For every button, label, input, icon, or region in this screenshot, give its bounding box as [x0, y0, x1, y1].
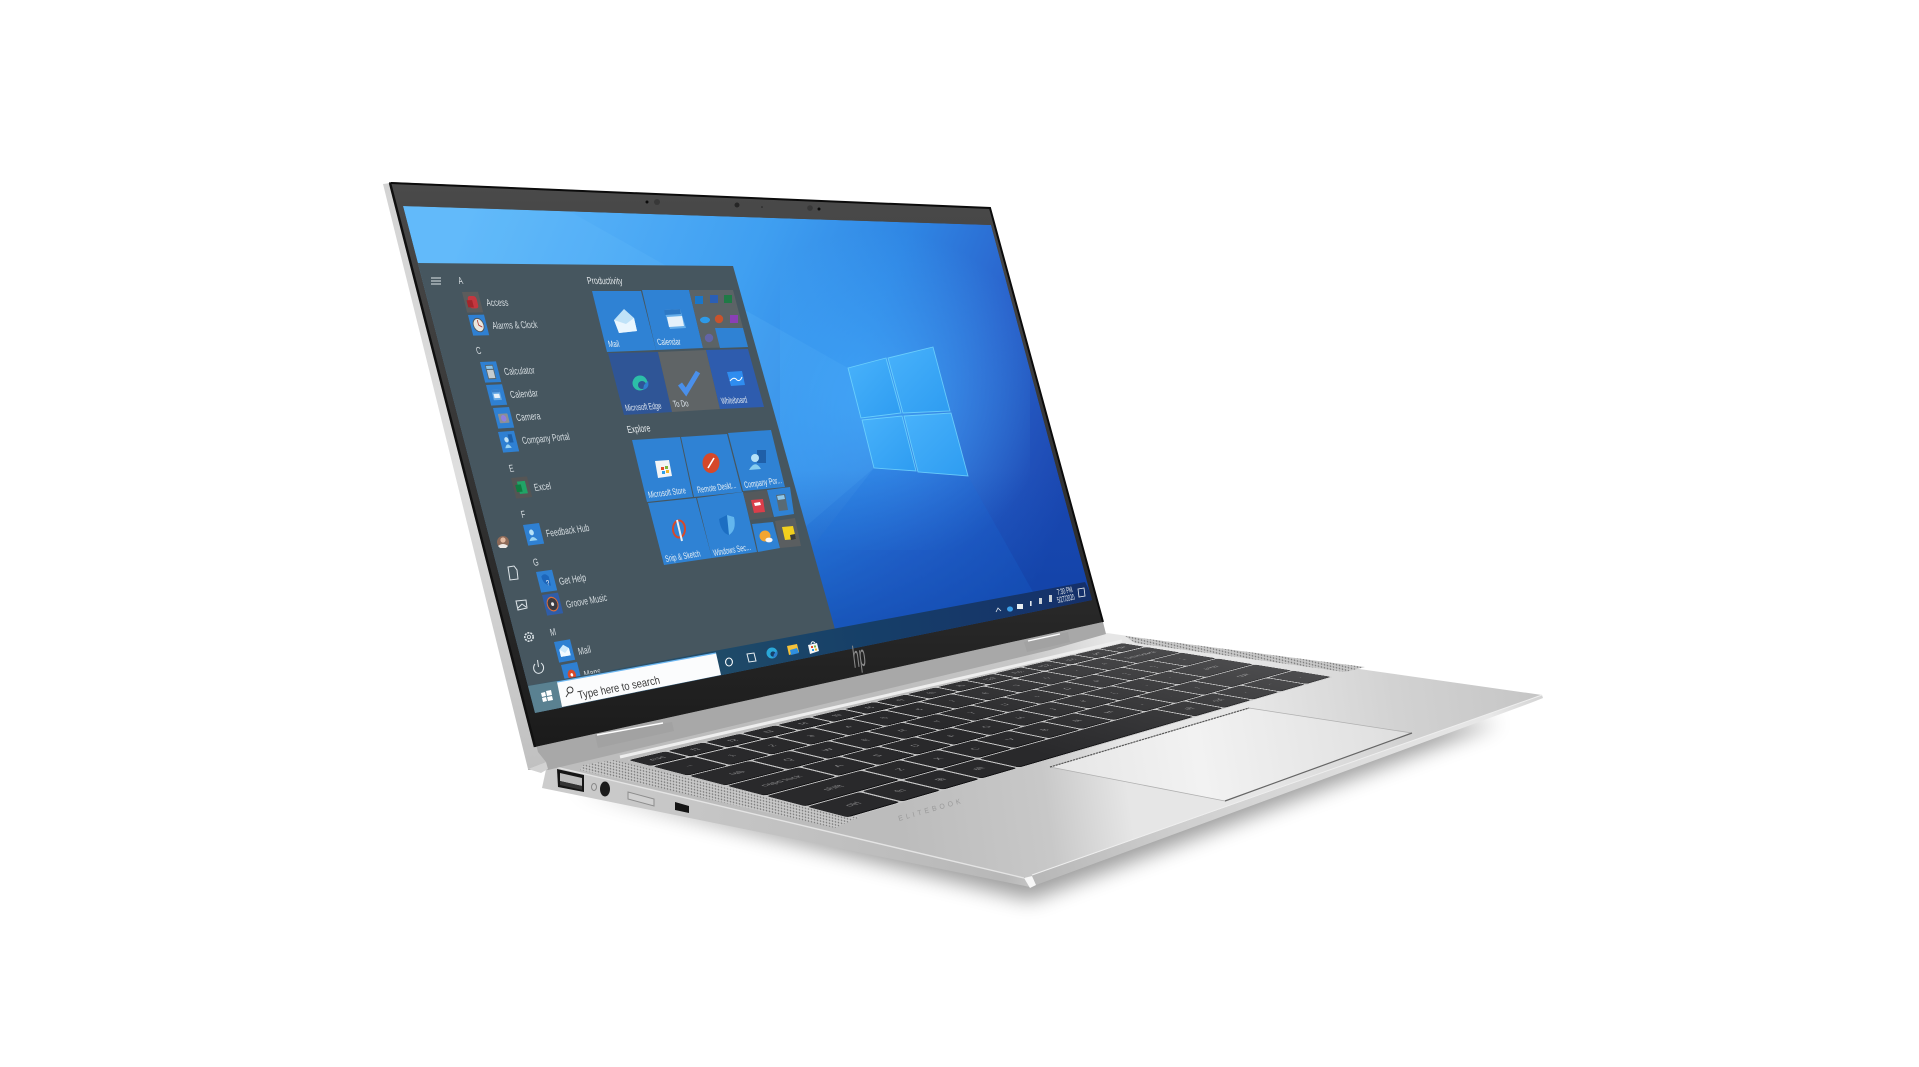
icon: Feedback Hub: [523, 523, 544, 546]
bottom row: alt: [1180, 707, 1197, 710]
icon: File Explorer: [787, 644, 799, 655]
shift row: Z: [892, 768, 908, 771]
function row: f2: [725, 738, 741, 742]
app list labels: Get Help: [558, 571, 587, 587]
bottom row: ctrl: [1209, 698, 1227, 702]
tile: Sticky Notes: [775, 518, 801, 548]
number row: 8: [979, 692, 991, 694]
app list labels: Calculator: [503, 364, 536, 377]
home row: ': [1167, 677, 1177, 679]
function row: f3: [761, 730, 777, 734]
tile: Whiteboard: Whiteboard: [720, 394, 748, 406]
qwerty row: Q: [780, 758, 796, 762]
webcam sensors: [646, 199, 820, 211]
app list letters: A: [457, 275, 464, 286]
number row: 6: [913, 708, 926, 711]
app list labels: Calendar: [509, 387, 539, 400]
home row: K: [1077, 699, 1091, 702]
tile: News: [743, 490, 773, 520]
icon: power: [534, 660, 544, 673]
icon: headset: [592, 784, 596, 790]
shift row: shift: [820, 784, 846, 791]
lid corner chamfer: [528, 762, 548, 773]
trackpad: [1050, 708, 1412, 801]
home row: F: [944, 734, 959, 738]
HP logo: hp: [851, 638, 867, 675]
app list letters: C: [475, 345, 483, 356]
icon: Get Help: [536, 570, 557, 593]
qwerty row: tab: [726, 770, 748, 776]
icon: Alarms & Clock: [468, 315, 489, 336]
qwerty row: O: [1060, 687, 1074, 690]
tile: Windows Security: [697, 492, 757, 558]
icon: pictures: [516, 600, 527, 610]
tile: Microsoft Store: Microsoft Store: [647, 485, 687, 500]
lid hinge band: [528, 622, 1106, 770]
tile: Remote Desktop: [681, 434, 742, 497]
number row: 5: [878, 716, 891, 719]
right side edge: [1026, 695, 1543, 888]
qwerty row: T: [931, 720, 945, 723]
icon: Windows: [541, 690, 553, 702]
function row: f12: [1036, 664, 1053, 668]
wallpaper: [400, 206, 1098, 713]
number row: 2: [765, 744, 779, 747]
tile: To Do: [658, 350, 720, 412]
icon: settings: [525, 633, 533, 641]
qwerty row: [690, 653, 1215, 785]
icon: documents: [508, 566, 518, 580]
icon: Access: [462, 292, 483, 313]
home row: G: [979, 725, 994, 728]
port: SIM slot: [628, 792, 654, 806]
shift row: M: [1101, 710, 1117, 714]
system tray: 5/27/2020: [1056, 593, 1076, 605]
function row: f11: [1009, 670, 1026, 674]
function row: f10: [981, 677, 999, 681]
office app icons: [695, 295, 738, 342]
shift row: ,: [1134, 703, 1145, 705]
search box: [557, 653, 721, 707]
port: USB: [557, 769, 584, 792]
qwerty row: Y: [965, 711, 979, 714]
tile: Microsoft Edge: [608, 352, 672, 415]
left speaker grille: [580, 760, 860, 828]
qwerty row: U: [998, 703, 1012, 706]
icon: Camera: [493, 407, 514, 429]
section heading: Explore: Explore: [626, 422, 652, 435]
icon: Calculator: [480, 361, 501, 383]
home row: H: [1013, 716, 1027, 719]
app list labels: Mail: [577, 643, 592, 657]
brand name on deck: ELITEBOOK: [898, 798, 965, 823]
bottom row: ˆ: [1267, 683, 1279, 686]
qwerty row: ]: [1148, 666, 1159, 668]
function row: ins: [1063, 658, 1079, 661]
app list labels: Maps: [583, 665, 603, 680]
home row: caps lock: [757, 775, 805, 787]
bottom row: alt: [969, 766, 988, 771]
system tray: [996, 586, 1085, 612]
shift row: /: [1192, 687, 1203, 689]
tile: Snip & Sketch: Snip & Sketch: [664, 548, 702, 564]
icon: task view: [747, 653, 756, 662]
app list labels: Groove Music: [565, 591, 609, 610]
number row: 0: [1041, 677, 1053, 679]
taskbar icons: [726, 642, 819, 666]
taskbar: [526, 582, 1094, 714]
home row: [728, 658, 1252, 796]
icon: Store: [808, 642, 819, 654]
shift row: N: [1070, 719, 1085, 722]
tile: Windows Security: Windows Sec...: [712, 542, 752, 558]
app list labels: Feedback Hub: [545, 522, 591, 539]
bottom row: ctrl: [841, 801, 864, 807]
user avatar: [497, 536, 509, 548]
app list letters: G: [532, 556, 540, 568]
number row: 9: [1010, 684, 1023, 687]
shift row: C: [967, 747, 983, 751]
tile: Weather: [752, 522, 780, 552]
section heading: Productivity: Productivity: [586, 275, 624, 287]
qwerty row: P: [1090, 680, 1104, 682]
laptop lid and screen: [383, 182, 1106, 773]
clock text: 7:30 PM: [1056, 586, 1074, 597]
tile: Company Portal: [728, 430, 785, 491]
icon: Mail: [554, 639, 575, 663]
start menu panel: [417, 263, 838, 700]
tile: Mail: Mail: [607, 339, 621, 349]
app list letters: F: [520, 508, 527, 520]
tile: Mail: [592, 291, 656, 352]
qwerty row: I: [1031, 695, 1042, 698]
number row: backspace: [1122, 651, 1159, 659]
tile: To Do: To Do: [672, 398, 690, 409]
Windows logo: [848, 347, 968, 476]
app list labels: Company Portal: [521, 430, 571, 446]
function row: f1: [688, 747, 704, 751]
home row: S: [870, 754, 885, 757]
function row: f9: [954, 684, 968, 687]
qwerty row: [: [1120, 673, 1131, 675]
front side with ports: [542, 765, 1030, 887]
right speaker grille: [1125, 636, 1365, 672]
function row: f8: [924, 691, 939, 694]
icon: Company Portal: [498, 431, 519, 453]
number row: =: [1098, 663, 1111, 665]
number row: -: [1071, 670, 1082, 672]
qwerty row: R: [895, 729, 910, 732]
tile: Calendar: [642, 290, 703, 350]
icon: Groove Music: [542, 593, 563, 616]
display bezel: [389, 182, 1103, 747]
keyboard: [627, 643, 1333, 818]
bottom row: [808, 671, 1330, 817]
number row: 4: [842, 725, 855, 728]
shift row: [768, 664, 1290, 806]
lid silver edge: [383, 183, 546, 769]
tile: Whiteboard: [706, 349, 764, 409]
function row: [630, 644, 1144, 766]
app list labels: [485, 297, 609, 680]
right hinge: [1024, 632, 1070, 652]
search box: Type here to search: [577, 675, 662, 702]
bottom row: ⊞: [932, 777, 949, 782]
tile: Microsoft Edge: Microsoft Edge: [624, 400, 663, 413]
home row: J: [1046, 708, 1059, 711]
port: headphone jack: [600, 782, 610, 796]
qwerty row: W: [819, 748, 836, 752]
function row: esc: [646, 756, 669, 761]
app list labels: Excel: [533, 480, 552, 493]
tile: Calendar: Calendar: [656, 336, 682, 347]
home row: D: [907, 744, 923, 747]
app list letters: M: [549, 626, 557, 638]
shift row: X: [931, 757, 946, 761]
screen: [400, 206, 1098, 714]
icon: Cortana: [726, 658, 732, 666]
function row: f6: [862, 706, 877, 709]
shift row: B: [1037, 728, 1052, 731]
bottom row: fn: [891, 788, 909, 793]
number row: 3: [804, 734, 818, 738]
port: lock slot: [675, 802, 689, 813]
number row: [654, 647, 1179, 776]
home row: ;: [1138, 684, 1149, 686]
function row: f4: [796, 722, 811, 725]
function row: f5: [830, 714, 845, 717]
tile: Company Portal: Company Por...: [743, 475, 783, 490]
tile: Remote Desktop: Remote Deskt...: [696, 480, 737, 495]
shift row: V: [1003, 737, 1018, 741]
bottom row: ‹: [1240, 691, 1252, 693]
number row: 1: [725, 754, 739, 757]
bottom row: ›: [1293, 676, 1305, 678]
qwerty row: \: [1178, 658, 1188, 660]
number row: 7: [946, 700, 959, 702]
app list labels: Camera: [515, 410, 542, 423]
app list letters: E: [508, 462, 515, 474]
app list labels: Access: [485, 297, 510, 308]
keyboard deck: [547, 633, 1542, 888]
home row: L: [1108, 692, 1121, 694]
home row: A: [830, 764, 846, 768]
tile: Calculator: [767, 487, 794, 517]
left hinge: [595, 722, 674, 748]
qwerty row: E: [858, 738, 873, 742]
shift row: shift: [1233, 673, 1253, 678]
start button: [528, 681, 562, 713]
app list letters: [457, 275, 557, 638]
icon: Excel: [511, 476, 532, 499]
icon: search: [566, 687, 573, 697]
shadow under laptop: [570, 722, 1500, 900]
function row: prt: [1089, 652, 1104, 655]
app list icons: [462, 292, 582, 686]
function row: f7: [894, 699, 909, 702]
icon: notifications: [1078, 588, 1085, 597]
tile: Office group: [689, 290, 748, 348]
tile: Microsoft Store: [632, 437, 693, 502]
icon: Edge: [766, 648, 778, 658]
icon: Get Help: ?: [545, 580, 551, 588]
number row: ~: [683, 764, 697, 768]
icon: Maps: [561, 662, 580, 679]
shift row: .: [1163, 695, 1175, 697]
app list labels: Alarms & Clock: [491, 319, 539, 331]
tile: Snip & Sketch: [648, 498, 712, 565]
hamburger icon: [431, 278, 441, 284]
function row: del: [1113, 646, 1129, 649]
home row: enter: [1200, 665, 1222, 670]
icon: Calendar: [486, 384, 507, 406]
